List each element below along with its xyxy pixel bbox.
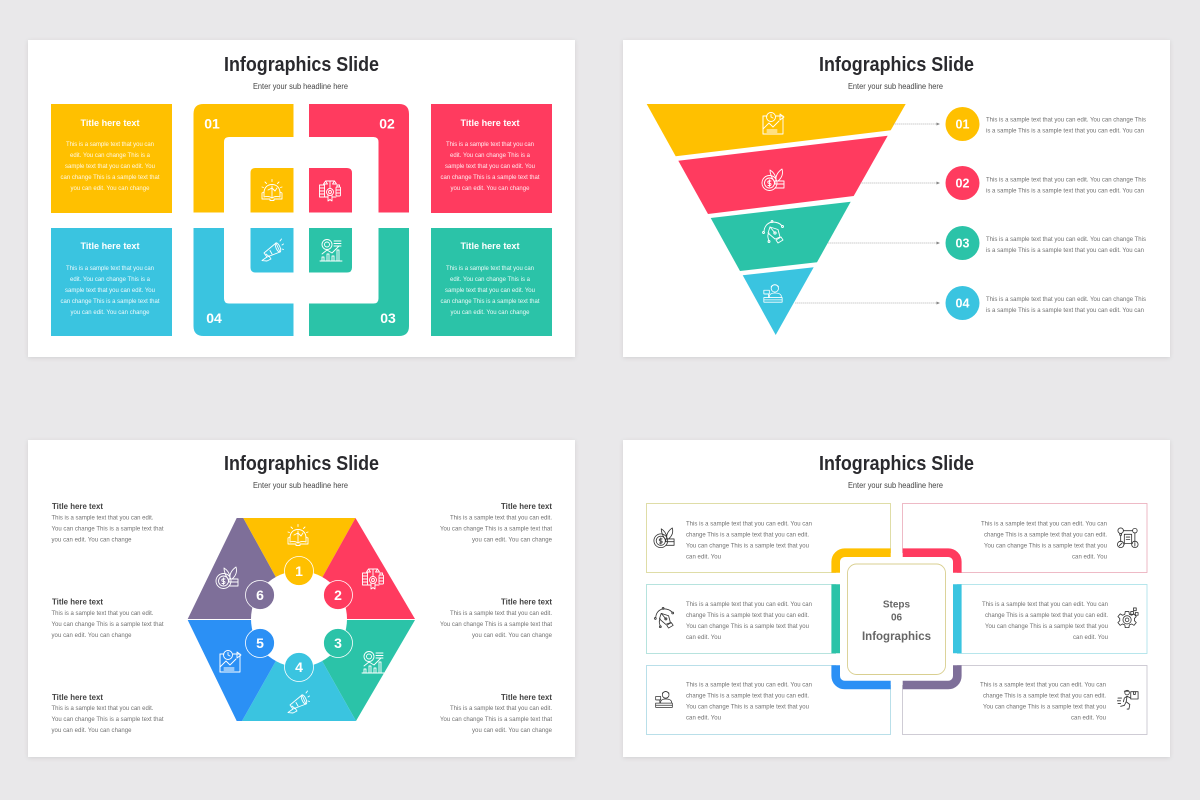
left text 1: Title here text <box>52 501 103 511</box>
title 3: Infographics Slide <box>224 453 379 475</box>
block 04 <box>194 228 294 336</box>
right text 1: Title here text <box>501 501 552 511</box>
left text 2: You can change This is a sample text that <box>52 622 164 628</box>
panel background 1 <box>28 40 575 357</box>
left text 1: you can edit. You can change <box>52 538 132 544</box>
card: top right red: Title here text <box>460 118 520 128</box>
card: bottom left blue: you can edit. You can change <box>70 310 150 316</box>
right text 1: you can edit. You can change <box>472 538 553 544</box>
card: bottom right teal: you can edit. You can change <box>450 310 530 316</box>
panel background 3 <box>28 440 575 757</box>
box: left bottom: change This is a sample text that you can edit. <box>686 694 809 700</box>
title 4: Infographics Slide <box>819 453 974 475</box>
box: right top: change This is a sample text that you can edit. <box>984 532 1107 538</box>
funnel layer 3 <box>711 202 851 271</box>
step 01: 01 <box>956 118 969 132</box>
left text 3: Title here text <box>52 692 103 702</box>
step 03 <box>828 226 1146 260</box>
segment 4 light blue <box>242 620 356 721</box>
block 01: 01 <box>204 116 220 132</box>
box: right bottom <box>902 666 1147 734</box>
box: right bottom: This is a sample text that you can edit. You can <box>980 682 1106 688</box>
right text 3: You can change This is a sample text that <box>440 717 552 723</box>
right text 2: You can change This is a sample text that <box>440 622 552 628</box>
left text 3: This is a sample text that you can edit. <box>52 706 154 712</box>
card: bottom left blue <box>51 228 172 336</box>
right text 2: Title here text <box>501 596 552 606</box>
right text 3: you can edit. You can change <box>472 728 553 734</box>
card: top left yellow: can change This is a sample text that <box>60 175 160 181</box>
box: left top: change This is a sample text that you can edit. <box>686 532 809 538</box>
block 03: 03 <box>380 310 396 326</box>
block 01 <box>194 104 294 212</box>
step 04: This is a sample text that you can edit. You can change This <box>986 297 1146 303</box>
subtitle 4: Enter your sub headline here <box>848 481 944 490</box>
card: top right red: edit. You can change This is a <box>450 153 531 159</box>
card: bottom right teal <box>431 228 552 336</box>
right text 2: you can edit. You can change <box>472 633 553 639</box>
box: left top <box>646 504 890 572</box>
subtitle 3: Enter your sub headline here <box>253 481 349 490</box>
card: bottom left blue: sample text that you can edit. You <box>65 288 155 294</box>
box: right middle <box>957 584 1147 654</box>
box: left bottom: You can change This is a sample text that you <box>686 704 809 710</box>
step 01 <box>893 107 1146 141</box>
box: left middle: You can change This is a sample text that you <box>686 624 809 630</box>
block 03 <box>309 228 409 336</box>
step 02: 02 <box>956 176 969 190</box>
box: left middle <box>646 584 836 654</box>
central square diagram <box>194 104 409 336</box>
subtitle 2: Enter your sub headline here <box>848 82 944 91</box>
step 03: 03 <box>956 236 969 250</box>
hexagon chart <box>188 518 415 721</box>
funnel layer 2 <box>678 136 888 214</box>
subtitle 1: Enter your sub headline here <box>253 82 349 91</box>
card: top left yellow <box>51 104 172 213</box>
panel: six steps slide <box>623 440 1170 757</box>
card: top left yellow: Title here text <box>80 118 140 128</box>
block 02: 02 <box>379 116 395 132</box>
centre card: Infographics <box>862 631 931 643</box>
funnel layer 1 <box>647 104 906 156</box>
segment 5 blue <box>188 620 299 721</box>
right text 3: This is a sample text that you can edit. <box>450 706 552 712</box>
centre frame brackets <box>836 553 957 685</box>
box: right middle: This is a sample text that you can edit. You can <box>982 602 1108 608</box>
step 03: This is a sample text that you can edit. You can change This <box>986 237 1146 243</box>
box: right middle: can edit. You <box>1073 635 1108 641</box>
box: left top: can edit. You <box>686 554 721 560</box>
card: top left yellow: edit. You can change This is a <box>70 153 151 159</box>
box: right top: You can change This is a sample text that you <box>984 544 1107 550</box>
title 2: Infographics Slide <box>819 54 974 76</box>
block 04: 04 <box>206 310 222 326</box>
card: top left yellow: you can edit. You can change <box>70 186 150 192</box>
panel background 4 <box>623 440 1170 757</box>
box: right bottom: You can change This is a sample text that you <box>983 704 1106 710</box>
box: right top: can edit. You <box>1072 554 1107 560</box>
number badges: 6 <box>256 587 264 603</box>
segment 6 purple <box>188 518 299 619</box>
card: bottom right teal: edit. You can change This is a <box>450 277 531 283</box>
card: top right red <box>431 104 552 213</box>
right text 1: You can change This is a sample text that <box>440 526 552 532</box>
number badges: 1 <box>295 563 303 579</box>
box: left bottom <box>646 666 890 734</box>
right text 3 <box>440 692 553 734</box>
card: top left yellow: This is a sample text that you can <box>66 142 154 148</box>
panel: square blocks slide <box>28 40 575 357</box>
left text 1 <box>52 501 164 544</box>
box: left middle: This is a sample text that you can edit. You can <box>686 602 812 608</box>
card: top right red: you can edit. You can change <box>450 186 530 192</box>
left text 1: This is a sample text that you can edit. <box>52 516 154 522</box>
box: left middle: can edit. You <box>686 635 721 641</box>
left text 2: This is a sample text that you can edit. <box>52 611 154 617</box>
left text 2: you can edit. You can change <box>52 633 132 639</box>
segment 1 yellow <box>243 518 356 619</box>
panel: hexagon slide <box>28 440 575 757</box>
box: left top: This is a sample text that you can edit. You can <box>686 522 812 528</box>
number badges: 2 <box>334 587 342 603</box>
centre card: 06 <box>891 612 902 624</box>
card: top right red: can change This is a sample text that <box>440 175 540 181</box>
step 01: is a sample This is a sample text that you can edit. You can <box>986 128 1144 134</box>
box: right middle: change This is a sample text that you can edit. <box>985 613 1108 619</box>
left text 3 <box>52 692 164 734</box>
panel: funnel slide <box>623 40 1170 357</box>
number badges: 4 <box>295 659 303 675</box>
step 04: is a sample This is a sample text that you can edit. You can <box>986 308 1144 314</box>
step 01: This is a sample text that you can edit. You can change This <box>986 118 1146 124</box>
title 1: Infographics Slide <box>224 54 379 76</box>
card: bottom right teal: can change This is a sample text that <box>440 299 540 305</box>
box: left bottom: can edit. You <box>686 716 721 722</box>
left text 2: Title here text <box>52 596 103 606</box>
step 04: 04 <box>956 296 969 310</box>
centre hole <box>251 571 347 667</box>
card: bottom left blue: Title here text <box>80 241 140 251</box>
segment icons <box>216 524 384 713</box>
card: bottom right teal: Title here text <box>460 241 520 251</box>
funnel layer 4 <box>743 267 814 335</box>
box: right top: This is a sample text that you can edit. You can <box>981 522 1107 528</box>
centre card: Steps <box>883 600 911 610</box>
step 02: This is a sample text that you can edit. You can change This <box>986 178 1146 184</box>
segment 2 red <box>299 518 415 619</box>
card: bottom left blue: edit. You can change This is a <box>70 277 151 283</box>
right text 3: Title here text <box>501 692 552 702</box>
box: left middle: change This is a sample text that you can edit. <box>686 613 809 619</box>
right text 1 <box>440 501 553 544</box>
right text 1: This is a sample text that you can edit. <box>450 516 552 522</box>
step 02: is a sample This is a sample text that you can edit. You can <box>986 188 1144 194</box>
card: bottom right teal: This is a sample text that you can <box>446 266 534 272</box>
box: right bottom: can edit. You <box>1071 716 1106 722</box>
card: top right red: sample text that you can edit. You <box>445 164 535 170</box>
centre card <box>848 564 946 674</box>
step 03: is a sample This is a sample text that you can edit. You can <box>986 248 1144 254</box>
left text 3: you can edit. You can change <box>52 728 132 734</box>
panel background 2 <box>623 40 1170 357</box>
left text 1: You can change This is a sample text that <box>52 526 164 532</box>
left text 2 <box>52 596 164 639</box>
step 04 <box>795 286 1146 320</box>
box: left top: You can change This is a sample text that you <box>686 544 809 550</box>
number badges: 5 <box>256 635 264 651</box>
card: top right red: This is a sample text that you can <box>446 142 534 148</box>
card: bottom right teal: sample text that you can edit. You <box>445 288 535 294</box>
step 02 <box>860 166 1146 200</box>
card: top left yellow: sample text that you can edit. You <box>65 164 155 170</box>
box: left bottom: This is a sample text that you can edit. You can <box>686 682 812 688</box>
box: right middle: You can change This is a sample text that you <box>985 624 1108 630</box>
card: bottom left blue: can change This is a sample text that <box>60 299 160 305</box>
left text 3: You can change This is a sample text that <box>52 717 164 723</box>
card: bottom left blue: This is a sample text that you can <box>66 266 154 272</box>
box: right bottom: change This is a sample text that you can edit. <box>983 694 1106 700</box>
block 02 <box>309 104 409 212</box>
right text 2: This is a sample text that you can edit. <box>450 611 552 617</box>
funnel chart <box>647 104 906 335</box>
number badges <box>246 556 352 682</box>
segment 3 teal <box>299 620 415 721</box>
number badges: 3 <box>334 635 342 651</box>
right text 2 <box>440 596 553 639</box>
box: right top <box>902 504 1147 572</box>
